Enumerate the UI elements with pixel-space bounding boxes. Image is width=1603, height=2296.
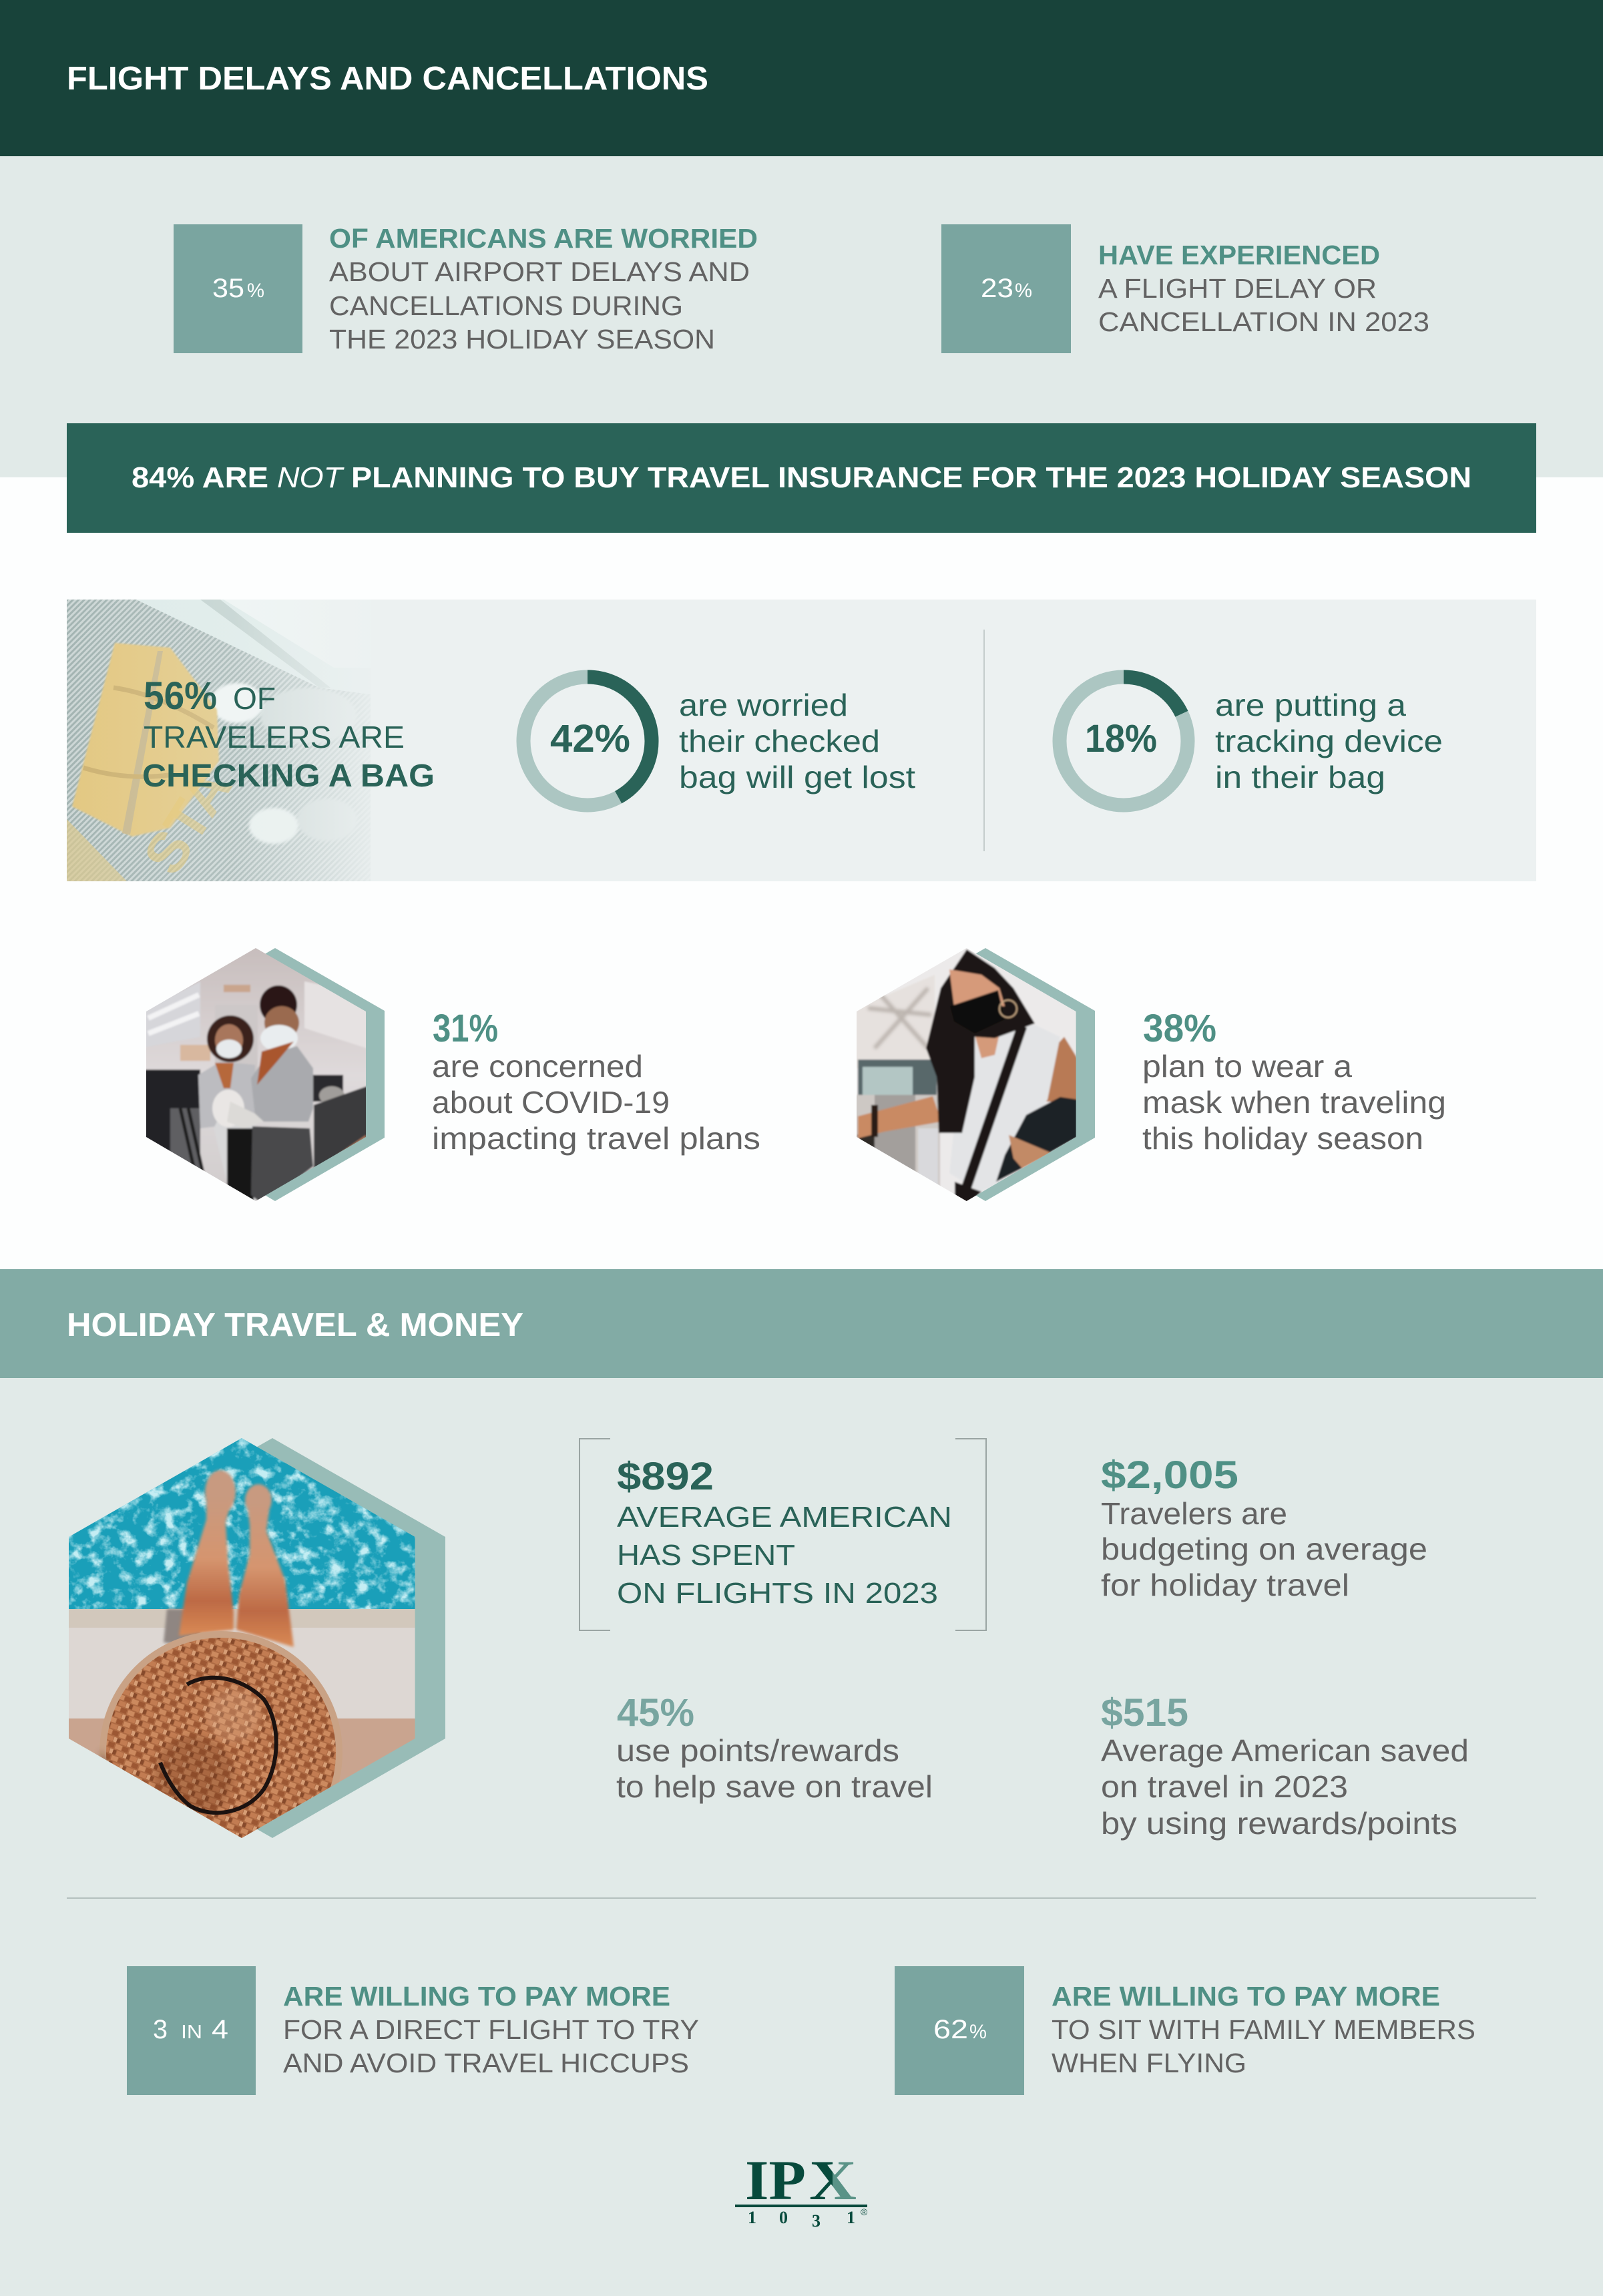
photo: bag on escalator [67,600,371,885]
heading: 56% of travelers are checking a bag: CHECKING A BAG [142,758,435,794]
description: ARE WILLING TO PAY MORE [1052,1981,1440,2012]
text: worried bag lost: their checked [679,724,880,758]
logo: IPX 1031: IP [745,2149,806,2212]
stat: 23% experienced delay [941,224,1429,353]
description: ON FLIGHTS IN 2023 [617,1577,938,1610]
stat: 3 in 4 direct flight [127,1966,699,2095]
description: ABOUT AIRPORT DELAYS AND [329,256,750,287]
description: CANCELLATION IN 2023 [1098,306,1429,337]
band: holiday travel and money [0,1269,1603,1378]
logo: IPX 1031: 3 [812,2211,821,2231]
logo: IPX 1031: ® [861,2207,868,2217]
number 62%: % [969,2021,987,2043]
heading: 56% of travelers are checking a bag: TRAVELERS ARE [144,720,405,754]
banner text: PLANNING TO BUY TRAVEL INSURANCE FOR THE 2023 HOLIDAY SEASON [351,461,1471,494]
text: tracking device: in their bag [1215,760,1385,794]
stat: $2,005 budget: budgeting on average [1101,1532,1427,1566]
stat: 45% points and rewards: to help save on travel [616,1769,933,1804]
stat: 38% mask: plan to wear a [1142,1049,1352,1084]
stat: 38% mask: 38% [1143,1007,1216,1050]
section: flight delays background [0,156,1603,477]
description [1052,1981,1475,2078]
title: FLIGHT DELAYS AND CANCELLATIONS [67,61,708,97]
number 23% [981,274,1032,303]
stat: 31% COVID concern: impacting travel plans [432,1121,760,1156]
logo: IPX 1031 [735,2149,868,2231]
number 35%: 35 [212,274,244,303]
description: AVERAGE AMERICAN [617,1501,952,1534]
number 62% [933,2015,987,2044]
number 35%: % [247,280,264,302]
donut chart: 18%: 18% [1085,717,1157,760]
stat: 31% COVID concern: are concerned [432,1049,643,1084]
stat: $2,005 budget: Travelers are [1101,1496,1287,1531]
stat: $515 saved: on travel in 2023 [1101,1769,1348,1804]
stat: 31% COVID concern: 31% [433,1007,498,1050]
logo: IPX 1031: X [809,2149,857,2212]
description: AND AVOID TRAVEL HICCUPS [283,2048,689,2078]
number 3 in 4: 4 [212,2015,228,2044]
description: WHEN FLYING [1052,2048,1246,2078]
number 3 in 4: 3 [153,2015,168,2044]
description [329,223,758,355]
text: worried bag lost: are worried [679,688,848,722]
stat: 35% of Americans worried [174,223,758,355]
text: tracking device [1215,688,1443,794]
stat: 38% mask [1142,1007,1446,1156]
number 23%: 23 [981,274,1013,303]
donut chart: 42% [523,677,652,805]
hexagon photo: flight attendants [140,941,385,1213]
banner: travel insurance [67,423,1536,533]
description: FOR A DIRECT FLIGHT TO TRY [283,2014,699,2045]
stat: $515 saved: $515 [1101,1691,1188,1735]
heading: HOLIDAY TRAVEL & MONEY [67,1307,523,1343]
logo: IPX 1031: 0 [779,2208,788,2227]
number 35% [212,274,264,303]
header: flight delays and cancellations [0,0,1603,156]
text: worried bag lost: bag will get lost [679,760,915,794]
section: holiday travel background [0,1378,1603,2296]
callout: $892 spent on flights [580,1439,986,1630]
donut chart: 18% [1060,677,1188,805]
stat: 45% points and rewards [616,1691,933,1804]
text: tracking device: tracking device [1215,724,1443,758]
stat: 38% mask: mask when traveling [1142,1085,1446,1120]
description: A FLIGHT DELAY OR [1098,273,1377,304]
text: tracking device: are putting a [1215,688,1406,722]
description: HAS SPENT [617,1539,795,1572]
description [1098,240,1429,337]
number 62%: 62 [933,2015,968,2044]
banner text: 84% ARE [132,461,268,494]
stat: $515 saved: by using rewards/points [1101,1806,1457,1841]
stat: $2,005 budget [1101,1453,1427,1602]
stat: 31% COVID concern: about COVID-19 [432,1085,670,1120]
description: ARE WILLING TO PAY MORE [283,1981,670,2012]
number 3 in 4: IN [181,2022,202,2043]
heading: 56% of travelers are checking a bag: OF [233,681,276,716]
stat: 38% mask: this holiday season [1142,1121,1423,1156]
heading: 56% of travelers are checking a bag: 56% [144,674,217,718]
hexagon photo: straw hat by pool [69,1438,445,1874]
text: worried bag lost [679,688,915,794]
stat: 62% sit with family [895,1966,1475,2095]
stat: $2,005 budget: for holiday travel [1101,1568,1349,1602]
logo: IPX 1031: 1 [748,2208,756,2227]
banner text: NOT [277,461,345,494]
heading: 56% of travelers are checking a bag [142,674,435,794]
donut chart: 42%: 42% [550,717,630,760]
stat: $2,005 budget: $2,005 [1101,1453,1238,1497]
description: TO SIT WITH FAMILY MEMBERS [1052,2014,1475,2045]
description: THE 2023 HOLIDAY SEASON [329,324,715,355]
photo: bag on escalator: STA [132,758,244,885]
stat: $515 saved [1101,1691,1469,1841]
description: HAVE EXPERIENCED [1098,240,1380,270]
amount: $892 [617,1455,714,1498]
stat: $515 saved: Average American saved [1101,1733,1469,1768]
number 23%: % [1015,280,1032,302]
logo: IPX 1031: 1 [847,2208,855,2227]
panel: checked bags [67,600,1536,885]
stat: 45% points and rewards: use points/rewards [616,1733,899,1768]
description [283,1981,699,2078]
stat: 45% points and rewards: 45% [617,1691,694,1735]
stat: 31% COVID concern [432,1007,760,1156]
description: CANCELLATIONS DURING [329,290,683,321]
description [617,1501,952,1610]
hexagon photo: woman in mask [851,941,1095,1208]
description: OF AMERICANS ARE WORRIED [329,223,758,254]
number 3 in 4 [153,2015,228,2044]
